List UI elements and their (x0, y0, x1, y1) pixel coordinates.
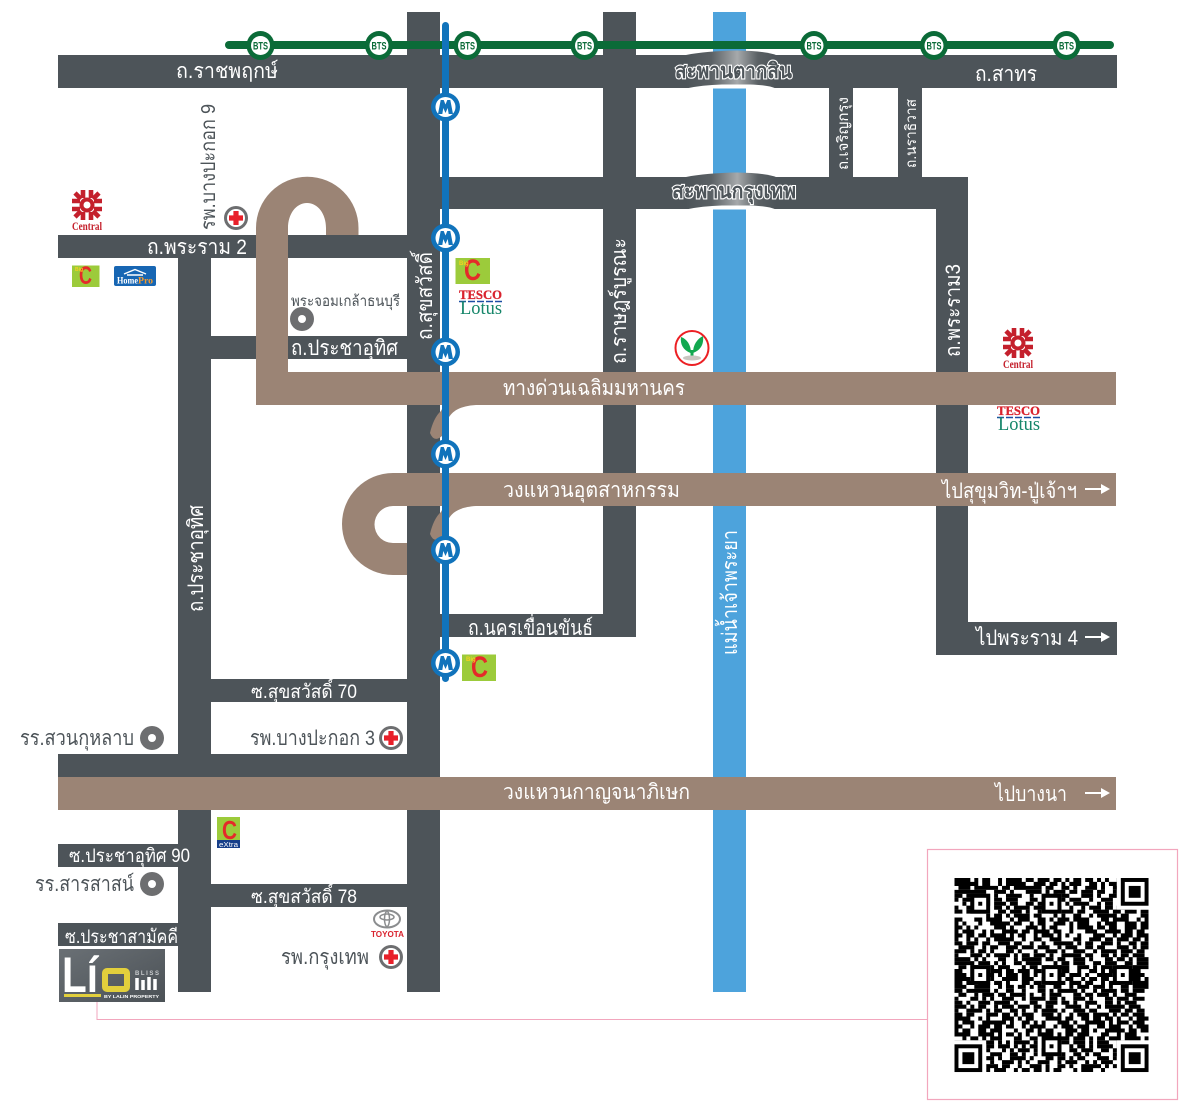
bridge label: Taksin: สะพานตากสิน (675, 60, 793, 83)
logo: Big C Extra (217, 815, 240, 849)
logo: HomePro (114, 266, 156, 286)
expressway: Chaloem Maha Nakhon with loop (256, 177, 1116, 405)
logo: Toyota (371, 910, 404, 939)
logo: Tesco Lotus centre: Lotus (460, 298, 502, 319)
bridge: Taksin (686, 50, 776, 88)
logo: Kasikorn bank (676, 331, 708, 365)
BTS stations: BTS (460, 40, 475, 52)
road label: Kanchanaphisek ring: วงแหวนกาญจนาภิเษก (503, 781, 690, 804)
river label: Chao Phraya: แม่น้ำเจ้าพระยา (715, 530, 742, 655)
logo: Big C centre: C (464, 254, 481, 287)
logo: Central west: Central (72, 219, 103, 233)
road label: Suksawat 70: ซ.สุขสวัสดิ์ 70 (251, 677, 357, 704)
logo: Big C west (72, 262, 100, 290)
logo: Big C Extra: C (222, 815, 237, 845)
logo: Big C west: Big (75, 267, 83, 273)
road label: to Bang Na: ไปบางนา (993, 782, 1067, 806)
logo: Big C south: C (471, 651, 488, 684)
landmark label: Bangpakok 9 hospital: รพ.บางปะกอก 9 (198, 104, 220, 230)
road label: Industrial Ring: วงแหวนอุตสาหกรรม (503, 479, 680, 503)
landmark label: Bangpakok 3 hospital: รพ.บางปะกอก 3 (250, 727, 375, 750)
icon: marker KMUTT (290, 307, 314, 331)
road label: Pracha Uthit north-south: ถ.ประชาอุทิศ (185, 504, 209, 612)
BTS stations: BTS (806, 40, 822, 52)
logo: Big C centre (456, 254, 490, 287)
BTS stations: BTS (372, 40, 386, 52)
logo: Tesco Lotus east: Lotus (998, 414, 1040, 435)
logo: Lio Bliss project: BY LALIN PROPERTY (104, 994, 159, 999)
icon: hospital Bangpakok 9 (224, 206, 248, 230)
ring road: Industrial Ring with loop (342, 473, 1116, 575)
metro line with stations (431, 22, 460, 682)
BTS stations: BTS (577, 40, 592, 52)
road label: Pracha Uthit 90: ซ.ประชาอุทิศ 90 (69, 846, 190, 868)
icon: hospital Bangkok (379, 945, 403, 969)
logo: Central east: Central (1003, 357, 1034, 371)
road label: Rat Burana: ถ.ราษฎร์บูรณะ (607, 238, 632, 364)
BTS stations (246, 31, 1080, 60)
arrow: to Rama 4 (1085, 632, 1110, 642)
road label: Pracha Uthit east-west: ถ.ประชาอุทิศ (291, 337, 399, 361)
logo: HomePro: Home (117, 276, 138, 286)
logo: Big C centre: Big (459, 261, 469, 267)
BTS stations: BTS (253, 40, 268, 52)
road label: Narathiwat: ถ.นราธิวาส (903, 99, 920, 168)
logo: Central east (1003, 328, 1034, 371)
logo: Big C west: C (79, 262, 92, 290)
logo: Tesco Lotus centre (459, 287, 502, 319)
logo: HomePro: Pro (138, 276, 154, 286)
road label: Nakhon Khuean Khan: ถ.นครเขื่อนขันธ์ (468, 613, 593, 640)
arrow: to Bang Na (1085, 788, 1110, 798)
logo: Big C south: Big (466, 657, 476, 663)
road label: Charoen Krung: ถ.เจริญกรุง (835, 97, 853, 170)
road label: to Sukhumvit-Pu Chao: ไปสุขุมวิท-ปู่เจ้าฯ (940, 479, 1077, 504)
logo: Lio Bliss project (59, 947, 165, 1003)
BTS stations: BTS (1059, 40, 1074, 52)
icon: marker Suan Kularb (140, 726, 164, 750)
road label: Sathorn: ถ.สาทร (975, 63, 1037, 86)
panel: QR code (928, 850, 1178, 1100)
connector line from project to QR code (97, 1002, 927, 1020)
logo: Central west (72, 190, 103, 233)
ring road: Kanchanaphisek (58, 777, 1116, 810)
logo: Tesco Lotus centre: TESCO (459, 287, 502, 302)
road label: to Rama 4: ไปพระราม 4 (974, 626, 1078, 650)
road label: Rama 3: ถ.พระราม3 (942, 264, 965, 357)
logo: Lio Bliss project: BLISS (135, 971, 159, 977)
road label: Rama 2: ถ.พระราม 2 (147, 236, 247, 259)
BTS line (225, 31, 1114, 60)
logo: Big C south (462, 651, 496, 684)
bridge label: Krung Thep: สะพานกรุงเทพ (672, 180, 796, 205)
road label: Suksawat 78: ซ.สุขสวัสดิ์ 78 (251, 882, 357, 909)
logo: Lio Bliss project: Lí (62, 947, 100, 1003)
logo: Toyota: TOYOTA (371, 930, 404, 939)
logo: Tesco Lotus east (997, 403, 1040, 435)
road network (58, 12, 1117, 992)
landmark label: Bangkok hospital: รพ.กรุงเทพ (281, 946, 369, 970)
icon: hospital Bangpakok 3 (379, 726, 403, 750)
arrow: to Sukhumvit (1085, 484, 1110, 494)
icon: marker Sarasas (140, 872, 164, 896)
logo: Big C Extra: eXtra (219, 842, 238, 849)
landmark label: Sarasas school: รร.สารสาสน์ (35, 872, 134, 896)
landmark label: Suan Kularb school: รร.สวนกุหลาบ (20, 727, 134, 751)
road label: Ratchaphruek: ถ.ราชพฤกษ์ (176, 59, 278, 83)
bridge: Krung Thep (686, 172, 776, 210)
river: Chao Phraya (713, 12, 746, 992)
road label: Pracha Samakkhi: ซ.ประชาสามัคคี (65, 926, 178, 948)
road label: Suksawat: ถ.สุขสวัสดิ์ (409, 250, 438, 340)
logo: Tesco Lotus east: TESCO (997, 403, 1040, 418)
BTS stations: BTS (926, 40, 942, 52)
ramp curves beside metro line (430, 405, 476, 540)
road label: Chaloem Maha Nakhon expressway: ทางด่วนเฉลิมมหานคร (503, 377, 685, 400)
landmark label: KMUTT: พระจอมเกล้าธนบุรี (291, 293, 400, 311)
